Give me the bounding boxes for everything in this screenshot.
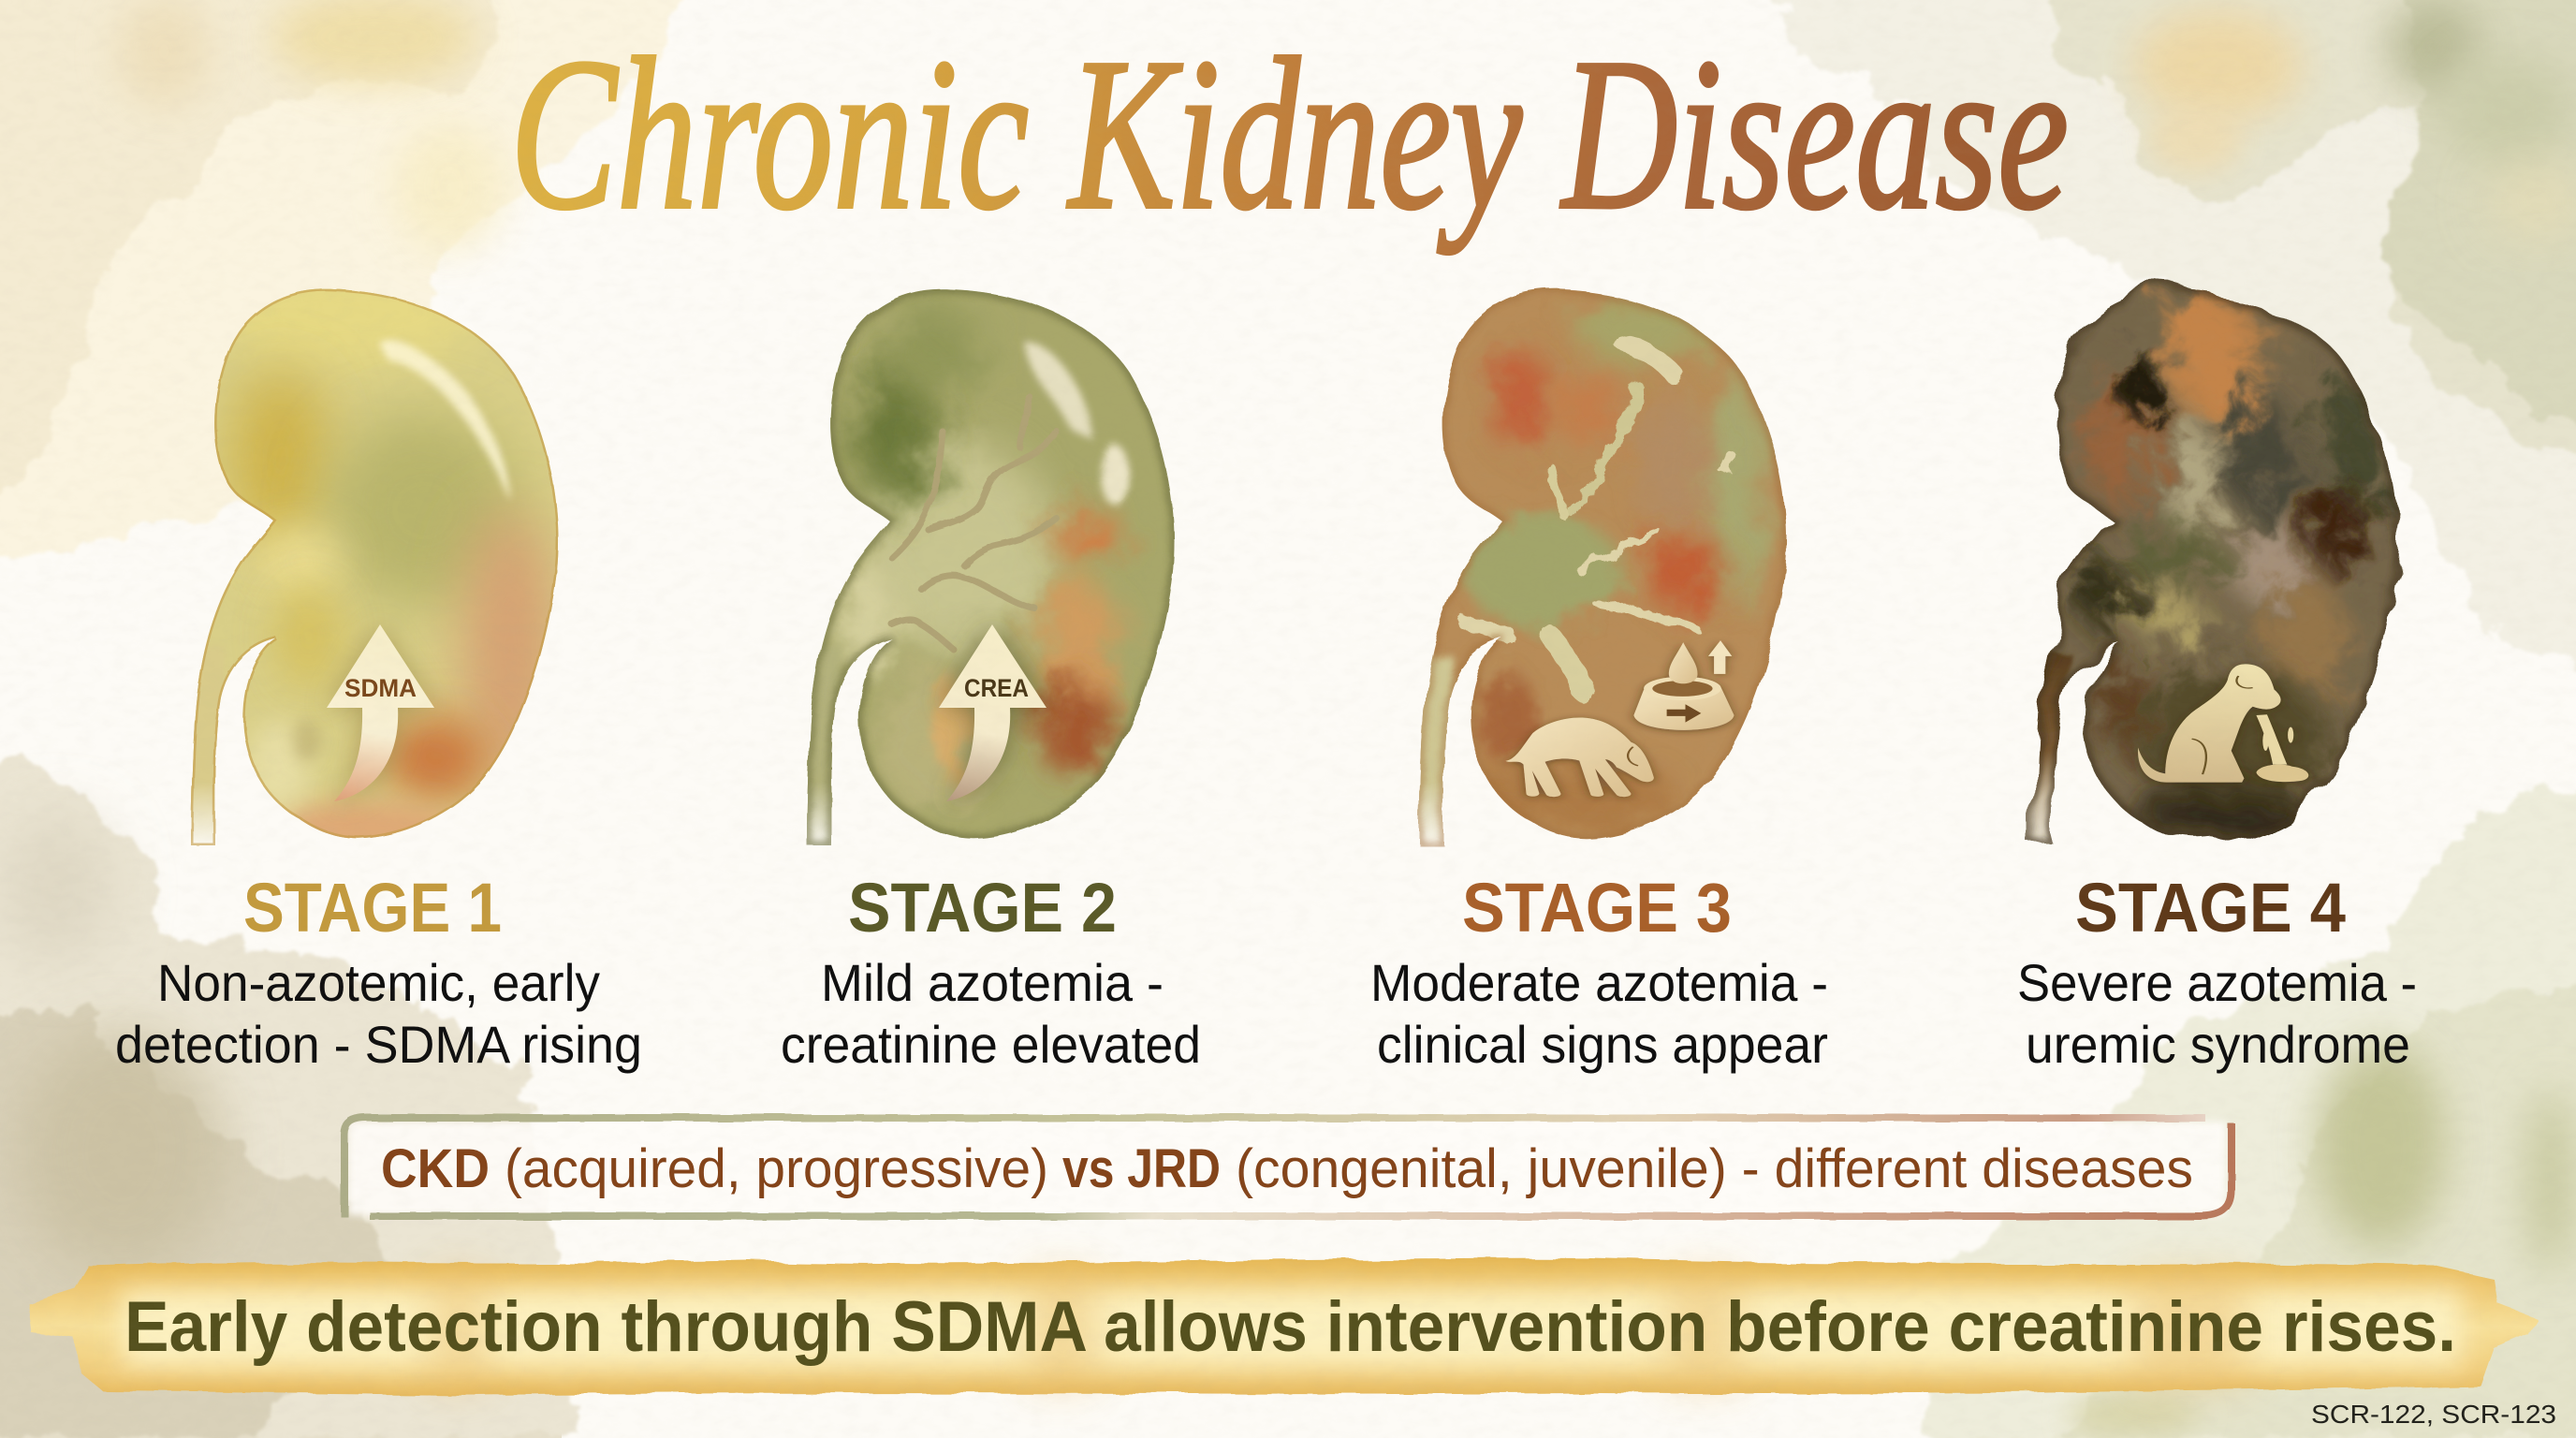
stage 3 heading: STAGE 3 [1462, 869, 1732, 946]
icon: vomiting dog [2138, 664, 2308, 783]
callout: CKD vs JRD: (acquired, progressive) [505, 1138, 1048, 1199]
icon: water bowl and droplet [1633, 640, 1734, 730]
callout: CKD vs JRD [344, 1118, 2232, 1217]
kidney: stage 2 [807, 288, 1175, 845]
arrow: SDMA rising: SDMA [344, 674, 417, 702]
stage 1 description [115, 953, 642, 1074]
stage 4 description: Severe azotemia - [2017, 953, 2417, 1012]
kidney: stage 3 [1417, 287, 1788, 846]
stage 1 description: Non-azotemic, early [157, 953, 600, 1012]
banner: key takeaway: Early detection through SDMA allows intervention before creatinine rises. [124, 1287, 2456, 1367]
stage 3 description: clinical signs appear [1377, 1015, 1828, 1074]
arrow: SDMA rising [327, 624, 434, 801]
panel: stage 1 [115, 262, 642, 1074]
title: Chronic Kidney Disease [510, 14, 2069, 255]
stage 4 description: uremic syndrome [2026, 1015, 2410, 1074]
kidney: stage 1 [191, 288, 558, 846]
arrow: creatinine rising [939, 624, 1046, 801]
stage 1 description: detection - SDMA rising [115, 1015, 642, 1074]
stage 2 description: creatinine elevated [781, 1015, 1201, 1074]
banner: key takeaway [28, 1258, 2537, 1395]
stage 3 description: Moderate azotemia - [1370, 953, 1828, 1012]
stage 2 description [781, 953, 1201, 1074]
kidney: stage 4 [2017, 271, 2420, 861]
stage 4 description [2017, 953, 2417, 1074]
stage 2 heading: STAGE 2 [848, 869, 1117, 946]
stage 2 description: Mild azotemia - [821, 953, 1164, 1012]
panel: stage 3 [1370, 271, 1828, 1074]
icon: lethargic dog [1505, 718, 1654, 797]
callout: CKD vs JRD: CKD [381, 1138, 490, 1199]
panel: stage 2 [781, 271, 1201, 1074]
panel: stage 4 [2017, 271, 2420, 1074]
stage 1 heading: STAGE 1 [243, 869, 502, 946]
callout: CKD vs JRD: vs JRD [1062, 1138, 1221, 1199]
stage 4 heading: STAGE 4 [2075, 869, 2346, 946]
stage 3 description [1370, 953, 1828, 1074]
arrow: creatinine rising: CREA [964, 674, 1029, 702]
source reference: SCR-122, SCR-123 [2311, 1400, 2556, 1429]
callout: CKD vs JRD: (congenital, juvenile) - different diseases [1236, 1138, 2193, 1199]
